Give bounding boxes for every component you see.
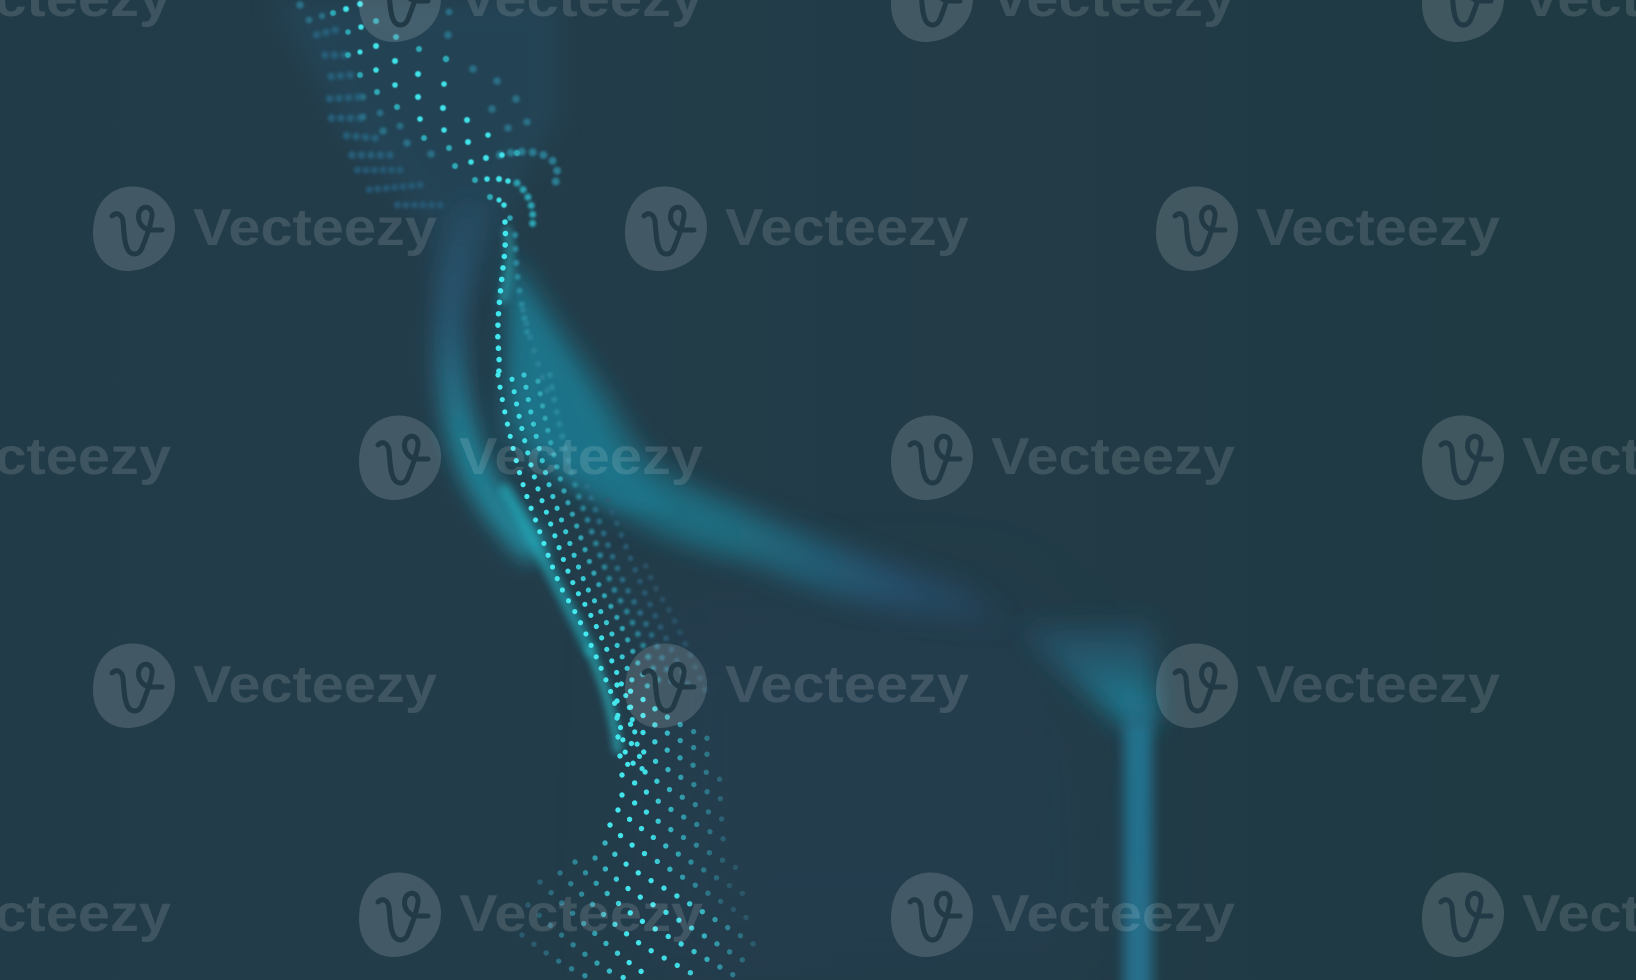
watermark: Vecteezy <box>725 199 969 257</box>
watermark <box>625 643 969 728</box>
watermark <box>625 186 969 271</box>
left edge glow band <box>450 215 618 750</box>
watermark <box>1422 0 1636 42</box>
right stem glow: column <box>1124 690 1152 980</box>
right stem glow: flared top <box>1022 622 1156 725</box>
watermark: Vecteezy <box>991 885 1235 943</box>
watermark <box>1422 415 1636 500</box>
watermark: Vecteezy <box>991 428 1235 486</box>
watermark: Vecteezy <box>193 199 437 257</box>
watermark: Vecteezy <box>1256 656 1500 714</box>
watermark <box>1422 872 1636 957</box>
watermark <box>93 643 437 728</box>
watermark <box>359 415 703 500</box>
bright spine dots <box>498 222 505 380</box>
secondary columns below spine <box>515 235 550 400</box>
top arcs: out-of-focus dots <box>500 152 557 228</box>
watermark <box>93 186 437 271</box>
upper left dim haze <box>270 0 560 300</box>
watermark <box>1156 186 1500 271</box>
watermark: Vecteezy <box>1256 199 1500 257</box>
lower lattice: bottom rows <box>522 843 755 978</box>
watermark: Vecteezy <box>725 656 969 714</box>
mid lattice columns <box>498 373 705 775</box>
watermark <box>359 872 703 957</box>
watermark <box>891 415 1235 500</box>
watermark <box>891 872 1235 957</box>
watermark: Vecteezy <box>459 885 703 943</box>
top dots: bright lattice <box>296 1 531 221</box>
top left blurred streaks <box>316 30 440 205</box>
watermark <box>359 0 703 42</box>
watermark: Vecteezy <box>459 428 703 486</box>
watermark: Vecteezy <box>193 656 437 714</box>
watermark <box>891 0 1235 42</box>
lower lattice: upper rows <box>610 685 750 920</box>
ribbon body between spine and right edge <box>510 260 680 510</box>
right ribbon glow <box>505 250 1010 625</box>
lower right haze <box>640 600 1110 980</box>
watermark <box>1156 643 1500 728</box>
